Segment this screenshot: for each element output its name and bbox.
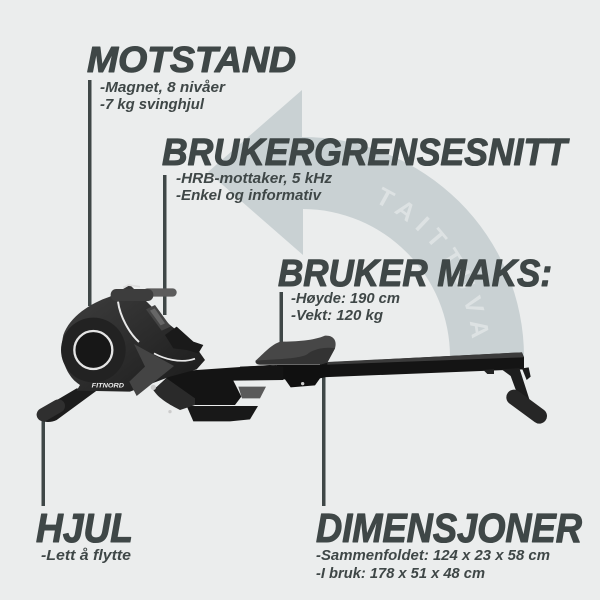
callout: brukergrensesnitt: BRUKERGRENSESNITT <box>162 132 570 174</box>
rear rail and seat <box>240 336 539 416</box>
arrow label: TAITTUVA <box>380 187 488 338</box>
leader line: brukergrensesnitt <box>163 175 166 315</box>
leader line: motstand <box>88 80 92 306</box>
callout: hjul: -Lett å flytte <box>41 548 131 564</box>
leader line: dimensjoner <box>322 370 326 506</box>
callout: bruker maks: -Vekt: 120 kg <box>291 308 383 324</box>
callout: bruker maks: -Høyde: 190 cm <box>291 291 400 307</box>
callout: motstand: -7 kg svinghjul <box>100 97 205 113</box>
callout: bruker maks: BRUKER MAKS: <box>278 253 552 295</box>
callout: brukergrensesnitt: -Enkel og informativ <box>176 188 322 204</box>
callout: motstand: MOTSTAND <box>87 39 296 80</box>
callout: brukergrensesnitt: -HRB-mottaker, 5 kHz <box>176 171 333 187</box>
callout: hjul: HJUL <box>36 505 133 551</box>
rowing machine <box>37 285 539 422</box>
leader line: bruker maks <box>280 292 283 342</box>
callout: dimensjoner: -I bruk: 178 x 51 x 48 cm <box>316 566 485 582</box>
callout: dimensjoner: -Sammenfoldet: 124 x 23 x 58 cm <box>316 548 550 564</box>
front unit <box>37 285 283 422</box>
callout: dimensjoner <box>316 505 582 582</box>
callout: motstand <box>87 39 296 113</box>
callout: brukergrensesnitt <box>162 132 570 204</box>
brand name: FITNORD <box>92 382 124 389</box>
leader line: hjul <box>42 418 45 506</box>
callout: bruker maks <box>278 253 552 324</box>
folding arrow <box>208 90 524 357</box>
callout: motstand: -Magnet, 8 nivåer <box>100 80 226 96</box>
